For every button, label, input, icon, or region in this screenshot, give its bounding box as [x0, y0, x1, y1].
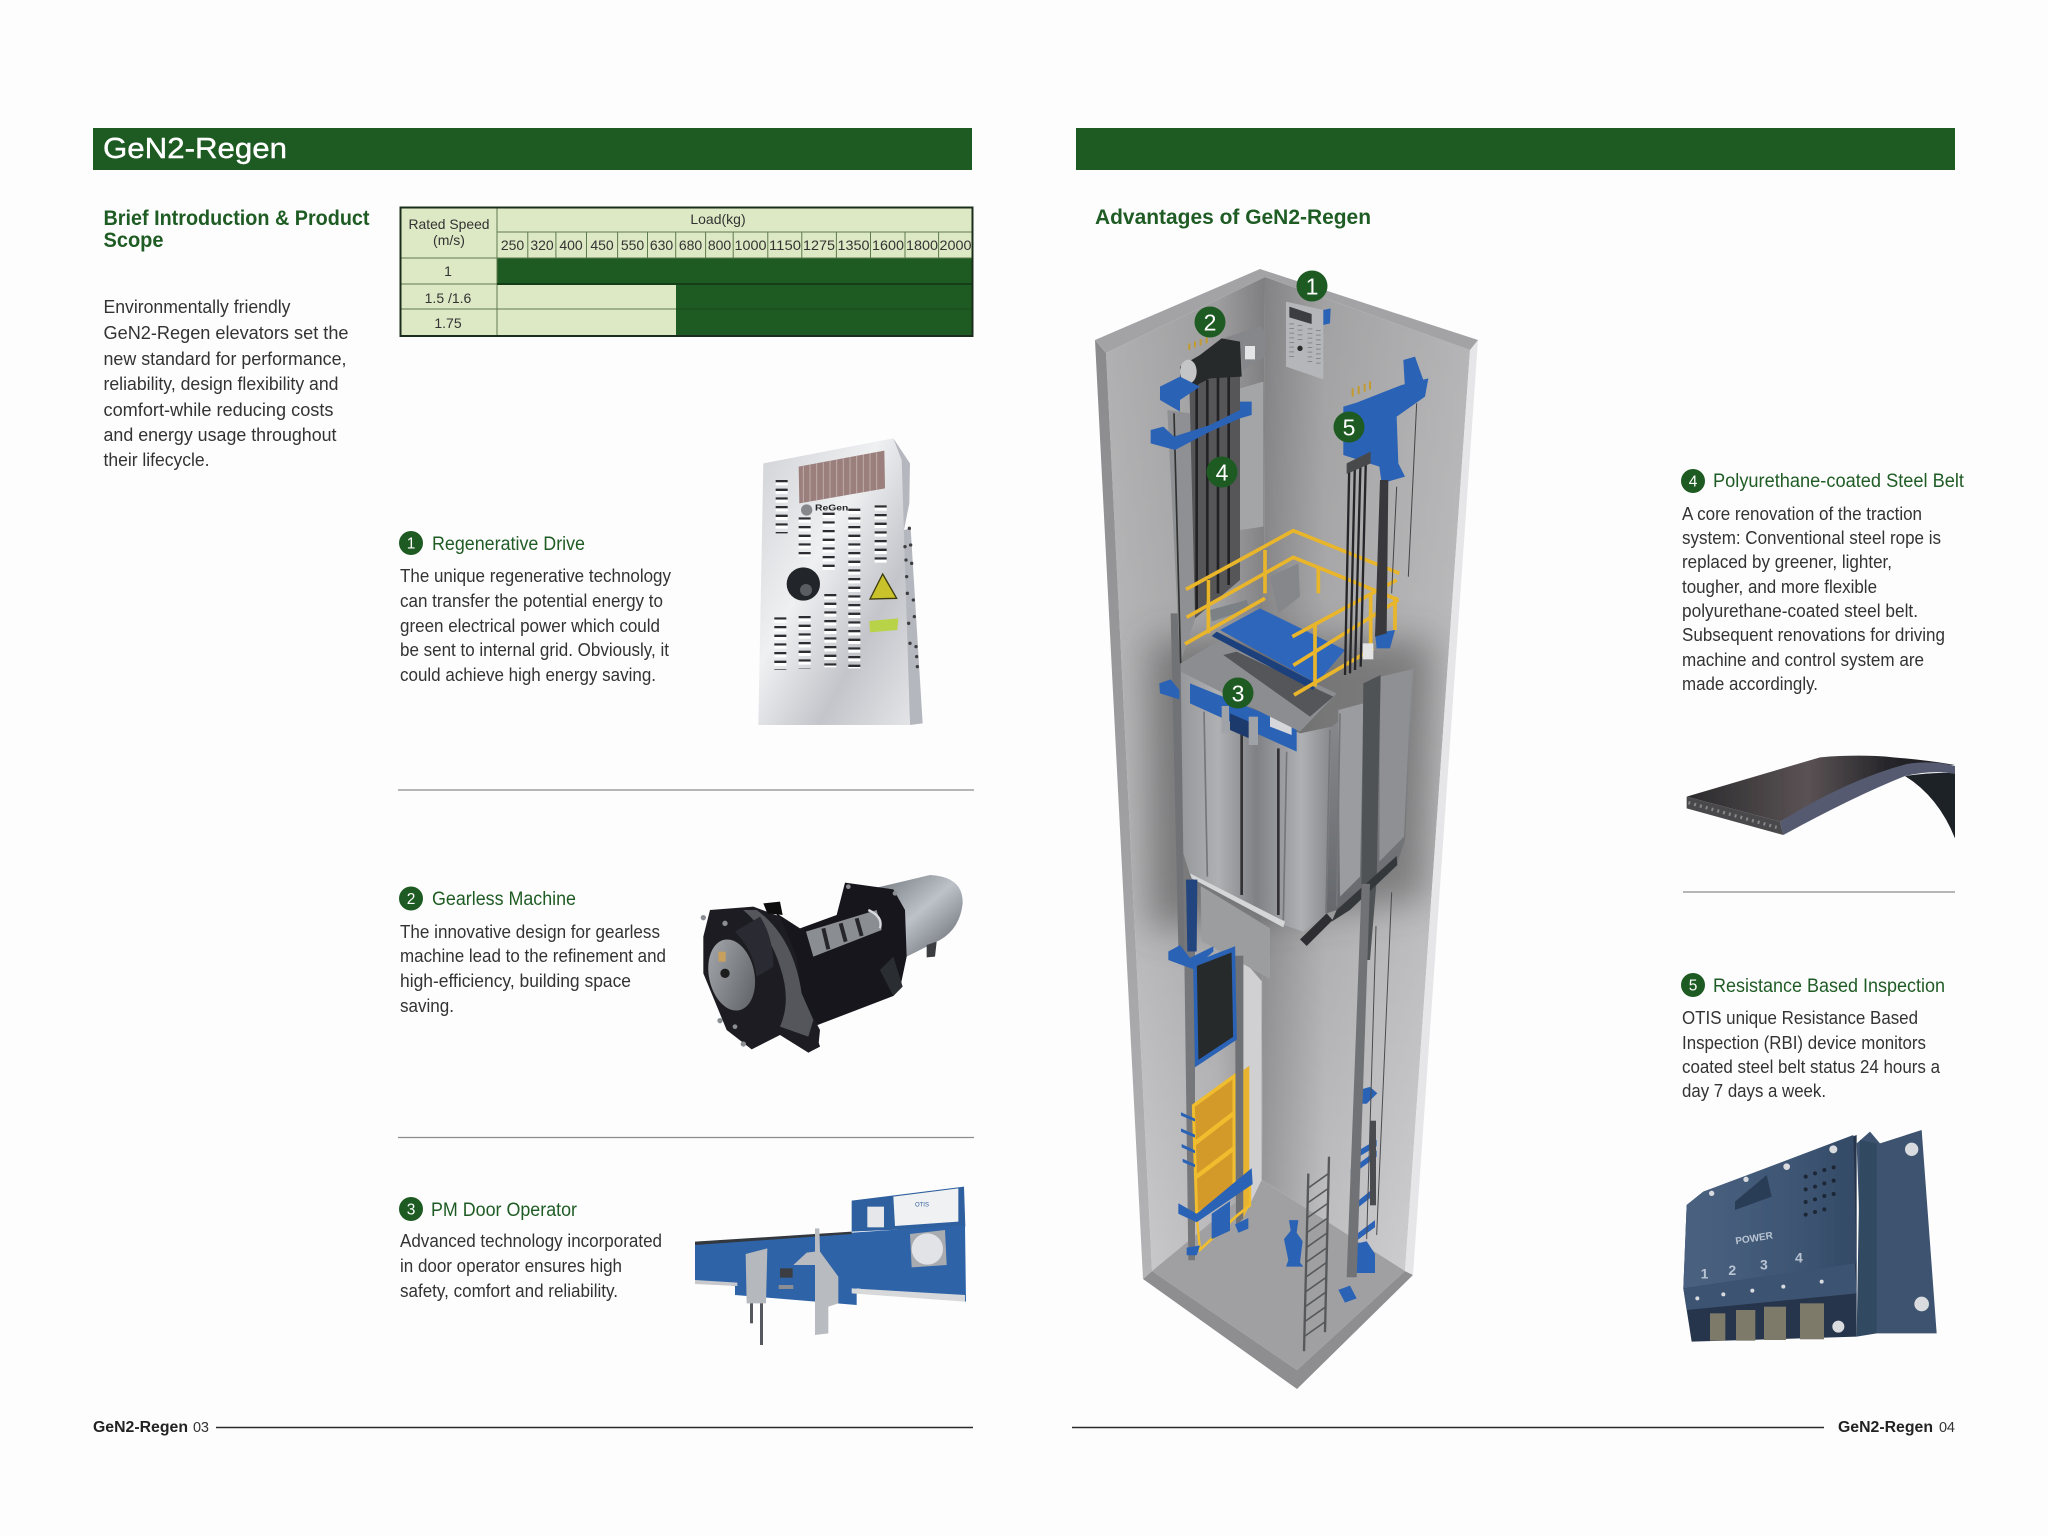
item 3: pm door operator text: [399, 1197, 662, 1301]
ladder: [1304, 1157, 1329, 1351]
item 1: regenerative drive text: [399, 531, 671, 685]
item 5: resistance based inspection text: OTIS unique Resistance Based: [1682, 1008, 1918, 1028]
item 1: regenerative drive text: could achieve high energy saving.: [400, 665, 656, 685]
item 2: gearless machine text: [399, 886, 666, 1016]
text block: introduction: comfort-while reducing costs: [104, 400, 334, 420]
callout markers on shaft: 4: [1216, 460, 1229, 486]
table: rated speed and load: [400, 207, 972, 336]
item 5: resistance based inspection text: Resistance Based Inspection: [1713, 976, 1945, 997]
item 4: polyurethane-coated steel belt text: replaced by greener, lighter,: [1682, 552, 1892, 572]
light wall panel: [1243, 960, 1262, 1218]
blue base and bracket: [1151, 377, 1252, 450]
image: resistance based inspection device: [1683, 1130, 1937, 1342]
item 4: polyurethane-coated steel belt text: Subsequent renovations for driving: [1682, 625, 1945, 645]
right bracket: [1343, 357, 1428, 648]
right rail and belts: [1345, 381, 1417, 675]
table: rated speed and load: 1.5 /1.6: [425, 290, 472, 306]
item 2: gearless machine text: Gearless Machine: [432, 889, 576, 910]
table: rated speed and load: 400: [559, 237, 583, 253]
heading: brief introduction: [104, 207, 370, 252]
item 2: gearless machine text: The innovative design for gearless: [400, 922, 660, 942]
table: rated speed and load: 1600: [872, 237, 904, 253]
image: door operator: [695, 1187, 966, 1345]
heading: advantages: Advantages of GeN2-Regen: [1095, 206, 1371, 229]
header bar: left with title: GeN2-Regen: [103, 133, 287, 165]
table: rated speed and load: 320: [530, 237, 554, 253]
image: gearless machine: [701, 875, 963, 1053]
image: regenerative drive unit: ReGen: [815, 503, 848, 513]
item 5: resistance based inspection text: Inspection (RBI) device monitors: [1682, 1033, 1926, 1053]
callout markers on shaft: 2: [1204, 310, 1216, 336]
item 3: pm door operator text: in door operator ensures high: [400, 1256, 622, 1276]
text block: introduction: their lifecycle.: [104, 450, 210, 470]
item 1: regenerative drive text: can transfer the potential energy to: [400, 591, 663, 611]
item 2: gearless machine text: machine lead to the refinement and: [400, 946, 666, 966]
table: rated speed and load: 2000: [940, 237, 972, 253]
image: resistance based inspection device: POWER: [1735, 1231, 1774, 1247]
divider: [1683, 891, 1955, 893]
item 3: pm door operator text: PM Door Operator: [431, 1200, 578, 1221]
item 4: polyurethane-coated steel belt text: system: Conventional steel rope is: [1682, 528, 1941, 548]
item 4: polyurethane-coated steel belt text: [1681, 469, 1965, 694]
item 2: gearless machine text: 2: [407, 891, 415, 908]
footer: left: [93, 1419, 973, 1436]
item 4: polyurethane-coated steel belt text: tougher, and more flexible: [1682, 577, 1877, 597]
item 3: pm door operator text: safety, comfort and reliability.: [400, 1281, 618, 1301]
table: rated speed and load: 450: [590, 237, 614, 253]
suspension belts tower: [1189, 370, 1240, 618]
table: rated speed and load: (m/s): [433, 232, 465, 248]
callout markers on shaft: [1194, 270, 1364, 708]
buffer: [1284, 1220, 1303, 1267]
lower equipment: [1168, 880, 1392, 1351]
item 5: resistance based inspection text: 5: [1689, 978, 1697, 994]
footer: left: GeN2-Regen: [93, 1419, 188, 1436]
table: rated speed and load: 1: [444, 263, 452, 279]
car guide rail: [1183, 880, 1195, 1260]
table: rated speed and load: 1350: [838, 237, 870, 253]
text block: introduction: and energy usage throughout: [104, 425, 336, 445]
header bar: left with title: [93, 128, 972, 170]
image: resistance based inspection device: 2: [1728, 1262, 1736, 1278]
counterweight: [1168, 880, 1235, 1064]
text block: introduction: reliability, design flexibility and: [104, 374, 338, 394]
table: rated speed and load: 680: [679, 237, 702, 253]
text block: introduction: Environmentally friendly: [104, 297, 290, 317]
table: rated speed and load: 550: [621, 237, 644, 253]
item 4: polyurethane-coated steel belt text: Polyurethane-coated Steel Belt: [1713, 471, 1965, 492]
text block: introduction: GeN2-Regen elevators set the: [104, 323, 348, 343]
table: rated speed and load: 1.75: [434, 315, 462, 331]
footer: left: 03: [193, 1420, 209, 1436]
machine box: [1223, 326, 1266, 370]
table: rated speed and load: 1800: [906, 237, 938, 253]
blue platform: [1220, 608, 1345, 683]
divider: [398, 789, 974, 791]
image: regenerative drive unit: [758, 438, 923, 725]
header bar: right: [1076, 128, 1955, 170]
item 1: regenerative drive text: 1: [407, 536, 415, 552]
callout markers on shaft: 5: [1343, 414, 1355, 440]
right guide rail and ropes: [1347, 884, 1392, 1277]
image: coated steel belt: [1687, 756, 1955, 838]
car apron: [1201, 886, 1270, 979]
table: rated speed and load: 800: [708, 237, 731, 253]
blue brackets: [1178, 1087, 1377, 1303]
item 1: regenerative drive text: The unique regenerative technology: [400, 566, 671, 586]
gearless machine: [1180, 337, 1242, 388]
side rail strip: [1167, 410, 1195, 663]
footer: right: GeN2-Regen: [1838, 1419, 1933, 1436]
table: rated speed and load: 630: [650, 237, 673, 253]
item 1: regenerative drive text: Regenerative Drive: [432, 534, 585, 555]
footer: right: [1072, 1419, 1955, 1436]
item 4: polyurethane-coated steel belt text: machine and control system are: [1682, 650, 1924, 670]
item 4: polyurethane-coated steel belt text: 4: [1689, 474, 1698, 490]
item 4: polyurethane-coated steel belt text: A core renovation of the traction: [1682, 504, 1922, 524]
image: resistance based inspection device: 4: [1795, 1250, 1803, 1266]
item 2: gearless machine text: high-efficiency, building space: [400, 971, 631, 991]
item 4: polyurethane-coated steel belt text: polyurethane-coated steel belt.: [1682, 601, 1918, 621]
table: rated speed and load: 1000: [734, 237, 767, 253]
item 1: regenerative drive text: green electrical power which could: [400, 616, 660, 636]
text block: introduction: new standard for performance,: [104, 349, 346, 369]
image: resistance based inspection device: 3: [1760, 1256, 1768, 1272]
footer: right: 04: [1939, 1420, 1955, 1436]
item 2: gearless machine text: saving.: [400, 996, 454, 1016]
image: resistance based inspection device: 1: [1701, 1265, 1709, 1281]
item 1: regenerative drive text: be sent to internal grid. Obviously, it: [400, 640, 669, 660]
yellow guard: [1193, 1066, 1250, 1250]
table: rated speed and load: 1150: [769, 237, 801, 253]
item 5: resistance based inspection text: [1681, 973, 1945, 1101]
callout markers on shaft: 3: [1232, 680, 1244, 706]
item 3: pm door operator text: Advanced technology incorporated: [400, 1231, 662, 1251]
upper equipment: [1151, 302, 1428, 732]
item 5: resistance based inspection text: coated steel belt status 24 hours a: [1682, 1057, 1941, 1077]
wall mounted drive: [1286, 302, 1331, 379]
shaft walls and floor: [1095, 269, 1478, 1389]
item 5: resistance based inspection text: day 7 days a week.: [1682, 1081, 1826, 1101]
image: door operator: OTIS: [915, 1203, 929, 1209]
illustration: elevator shaft cutaway: [1095, 269, 1478, 1389]
divider: [398, 1136, 974, 1138]
table: rated speed and load: 1275: [803, 237, 835, 253]
item 3: pm door operator text: 3: [407, 1202, 415, 1218]
text block: introduction: [104, 297, 348, 470]
car roof: [1181, 640, 1337, 732]
table: rated speed and load: 250: [501, 237, 524, 253]
table: rated speed and load: Rated Speed: [408, 216, 490, 232]
heading: brief introduction: Scope: [104, 229, 164, 252]
item 4: polyurethane-coated steel belt text: made accordingly.: [1682, 674, 1818, 694]
table: rated speed and load: Load(kg): [690, 211, 746, 227]
heading: brief introduction: Brief Introduction & Product: [104, 207, 370, 230]
steel panel: [1240, 382, 1263, 530]
yellow safety rails: [1185, 531, 1399, 695]
elevator car: [1159, 613, 1413, 960]
callout markers on shaft: 1: [1306, 274, 1318, 300]
